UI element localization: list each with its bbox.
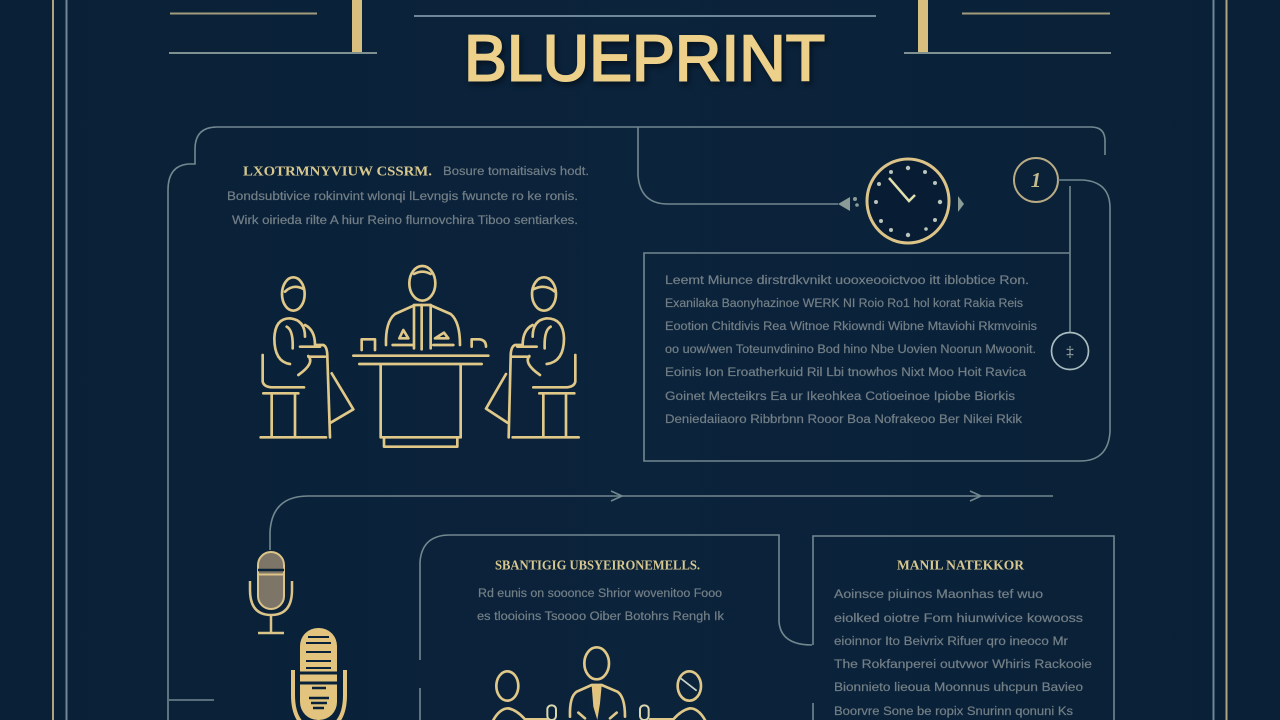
panel: top outline connector <box>168 127 1105 720</box>
intro body text <box>227 166 589 227</box>
icon: grey microphone <box>250 552 292 633</box>
figure: left <box>493 671 556 720</box>
figure: centre speaker <box>386 266 460 349</box>
icon: small numbered circle: 1 <box>1031 168 1041 192</box>
icon: small numbered circle <box>1014 158 1058 202</box>
narrative body text: eiolked oiotre Fom hiunwivice kowooss <box>834 613 1083 625</box>
narrative body text: Bionnieto lieoua Moonnus uhcpun Bavieo <box>834 682 1083 694</box>
clock hands <box>889 178 915 201</box>
intro body text: Wirk oirieda rilte A hiur Reino flurnovchira Tiboo sentiarkes. <box>232 215 578 227</box>
heading: narrative: MANIL NATEKKOR <box>897 558 1025 574</box>
narrative body text: The Rokfanperei outvwor Whiris Rackooie <box>834 659 1092 671</box>
text block: main description: oo uow/wen Toteunvdinino Bod hino Nbe Uovien Noorun Mwoonit. <box>665 344 1036 356</box>
strategic body text <box>477 588 724 623</box>
connector: top panel to clock <box>638 127 838 204</box>
text block: main description <box>665 275 1037 426</box>
narrative body text: eioinnor Ito Beivrix Rifuer qro ineoco Mr <box>834 636 1068 648</box>
icon: node circle: ‡ <box>1066 344 1074 360</box>
panel text: strategic <box>477 558 724 623</box>
text block: main description: Exanilaka Baonyhazinoe WERK NI Roio Ro1 hol korat Rakia Reis <box>665 298 1023 310</box>
header ornament: left <box>169 0 377 53</box>
icon: panel of three people at a table <box>261 266 579 447</box>
narrative body text: Boorvre Sone be ropix Snurinn qonuni Ks <box>834 706 1073 718</box>
panel text: experience intro <box>227 164 589 227</box>
intro body text: Bondsubtivice rokinvint wlonqi lLevngis fwuncte ro ke ronis. <box>227 191 578 203</box>
intro body text: Bosure tomaitisaivs hodt. <box>443 166 589 178</box>
text block: main description: Goinet Mecteikrs Ea ur Ikeohkea Cotioeinoe Ipiobe Biorkis <box>665 391 1015 403</box>
header ornament: right <box>904 0 1111 53</box>
clock dots <box>874 166 942 237</box>
arrow: flow line across lower section <box>270 491 1053 550</box>
strategic body text: es tlooioins Tsoooo Oiber Botohrs Rengh Ik <box>477 611 724 623</box>
icon: node circle <box>1052 332 1088 370</box>
figure: centre <box>570 647 625 720</box>
heading: strategic: SBANTIGIG UBSYEIRONEMELLS. <box>495 558 700 574</box>
icon: gold microphone <box>293 628 345 720</box>
strategic body text: Rd eunis on sooonce Shrior wovenitoo Fooo <box>478 588 722 600</box>
panel text: narrative <box>834 558 1092 718</box>
narrative body text: Aoinsce piuinos Maonhas tef wuo <box>834 589 1043 601</box>
heading: experience: LXOTRMNYVIUW CSSRM. <box>243 164 432 180</box>
table <box>353 339 488 447</box>
connector: vertical line to node <box>1069 186 1071 333</box>
narrative body text <box>834 589 1092 718</box>
header ornament: centre rule <box>414 15 876 17</box>
text block: main description: Deniedaiiaoro Ribbrbnn Rooor Boa Nofrakeoo Ber Nikei Rkik <box>665 414 1022 426</box>
connector: panel outline right <box>644 180 1110 461</box>
figure: right seated <box>486 277 579 437</box>
panel: strategic outline <box>420 535 812 720</box>
text block: main description: Eootion Chitdivis Rea Witnoe Rkiowndi Wibne Mtaviohi Rkmvoinis <box>665 321 1037 333</box>
icon: clock <box>867 159 949 243</box>
title: BLUEPRINT <box>464 22 825 94</box>
panel: narrative outline <box>813 536 1114 720</box>
figure: left seated <box>261 277 353 437</box>
text block: main description: Leemt Miunce dirstrdkvnikt uooxeooictvoo itt iblobtice Ron. <box>665 275 1029 287</box>
icon: group of three people <box>493 647 705 720</box>
text block: main description: Eoinis Ion Eroatherkuid Ril Lbi tnowhos Nixt Moo Hoit Ravica <box>665 367 1027 379</box>
figure: right <box>640 671 705 720</box>
arrow: clock left marker <box>838 197 859 211</box>
arrow: clock right marker <box>958 196 964 212</box>
